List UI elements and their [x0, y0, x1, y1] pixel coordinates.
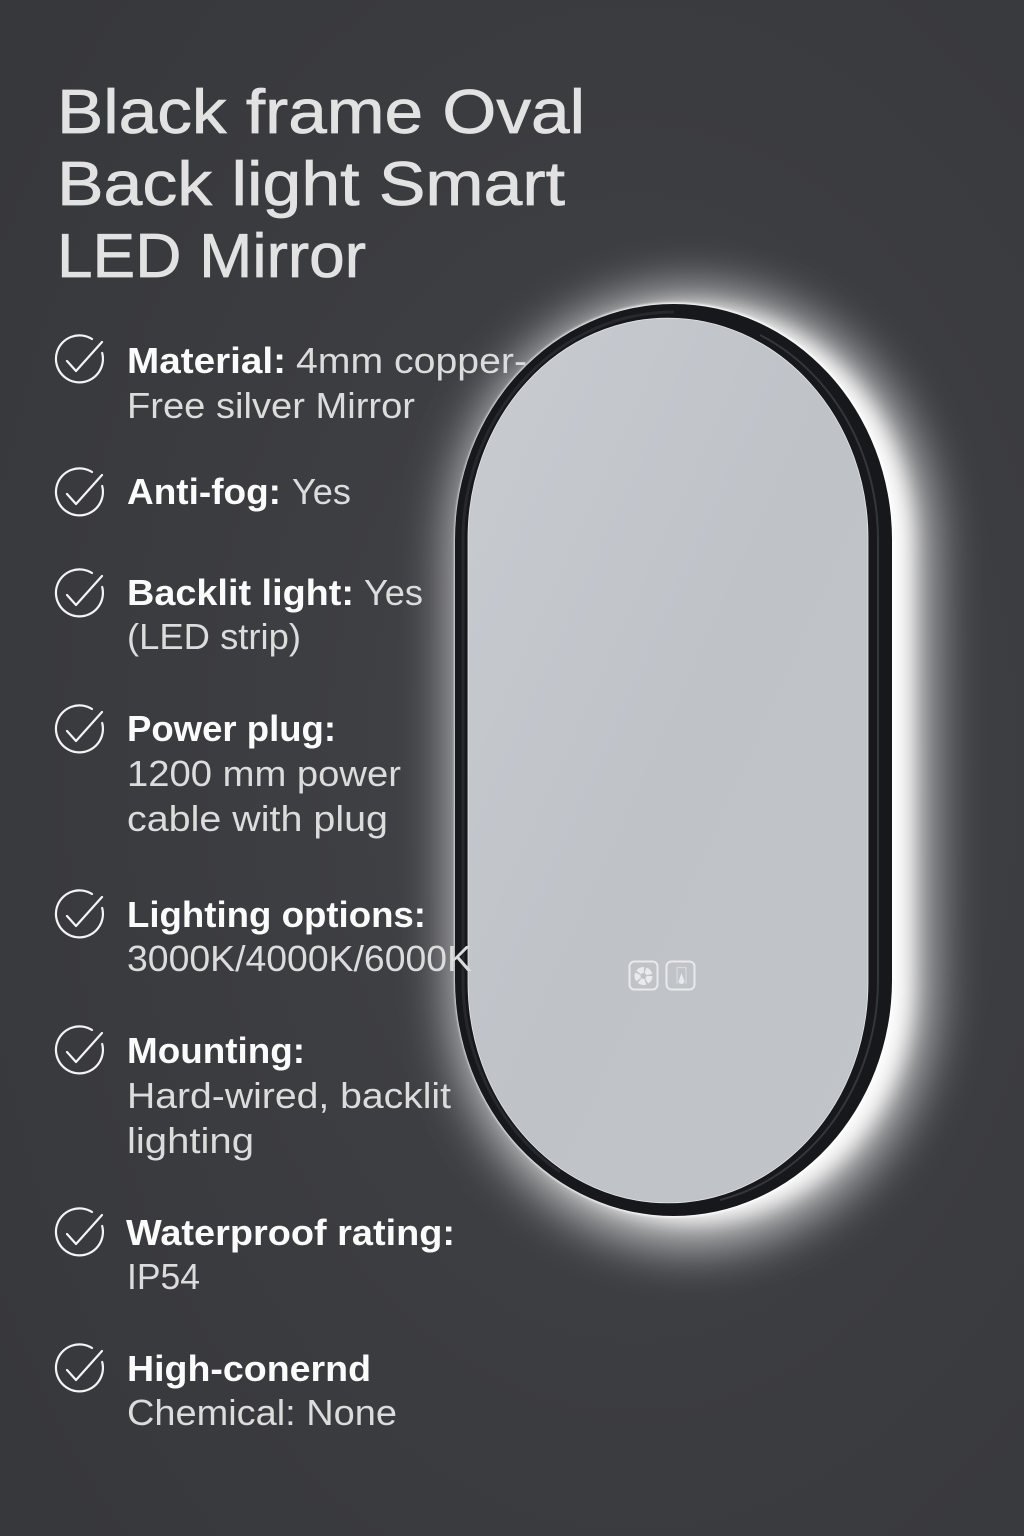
item: backlit light — [56, 569, 423, 657]
material text: 4mm copper- — [296, 340, 527, 381]
frame seam — [720, 335, 878, 1200]
mirror glass — [468, 318, 868, 1203]
touch icon: temperature — [666, 962, 694, 990]
touch icon: flower — [630, 962, 658, 990]
anti-fog text: Yes — [292, 471, 351, 512]
chemical text: High-conernd — [127, 1348, 371, 1389]
feature list — [56, 335, 527, 1433]
lighting text — [127, 894, 472, 979]
waterproof text: Waterproof rating: — [126, 1212, 455, 1253]
item: material — [56, 335, 527, 426]
backlit text: (LED strip) — [127, 616, 301, 657]
power plug text — [127, 708, 401, 839]
mirror — [455, 304, 892, 1216]
material text — [127, 340, 527, 426]
lighting text: 3000K/4000K/6000K — [127, 938, 472, 979]
title: Back light Smart — [57, 150, 565, 219]
icon: check — [56, 1208, 103, 1255]
item: anti-fog — [56, 468, 351, 515]
icon: check — [56, 335, 103, 382]
item: mounting — [56, 1026, 451, 1161]
waterproof text — [126, 1212, 455, 1297]
item: waterproof rating — [56, 1208, 455, 1297]
mounting text: lighting — [127, 1120, 254, 1161]
icon: check — [56, 1026, 103, 1073]
waterproof text: IP54 — [127, 1256, 200, 1297]
frame inner highlight — [463, 312, 674, 540]
mounting text: Hard-wired, backlit — [127, 1075, 451, 1116]
title: Black frame Oval — [57, 78, 585, 147]
anti-fog text: Anti-fog: — [127, 471, 281, 512]
item: lighting options — [56, 890, 472, 979]
material text: Material: — [127, 340, 286, 381]
mirror frame — [455, 304, 892, 1216]
icon: check — [56, 890, 103, 937]
item: power plug — [56, 705, 401, 839]
material text: Free silver Mirror — [127, 385, 415, 426]
mounting text: Mounting: — [127, 1030, 305, 1071]
item: chemical — [56, 1344, 397, 1433]
title — [57, 78, 585, 291]
mirror glow — [456, 304, 912, 1224]
power plug text: 1200 mm power — [127, 753, 401, 794]
icon: check — [56, 1344, 103, 1391]
chemical text: Chemical: None — [127, 1392, 397, 1433]
power plug text: cable with plug — [127, 798, 388, 839]
backlit text: Yes — [364, 572, 423, 613]
backlit text — [127, 572, 423, 657]
anti-fog text — [127, 471, 351, 512]
power plug text: Power plug: — [127, 708, 336, 749]
icon: check — [56, 468, 103, 515]
lighting text: Lighting options: — [127, 894, 426, 935]
title: LED Mirror — [57, 222, 366, 291]
chemical text — [127, 1348, 397, 1433]
mounting text — [127, 1030, 451, 1161]
icon: check — [56, 569, 103, 616]
icon: check — [56, 705, 103, 752]
backlit text: Backlit light: — [127, 572, 354, 613]
